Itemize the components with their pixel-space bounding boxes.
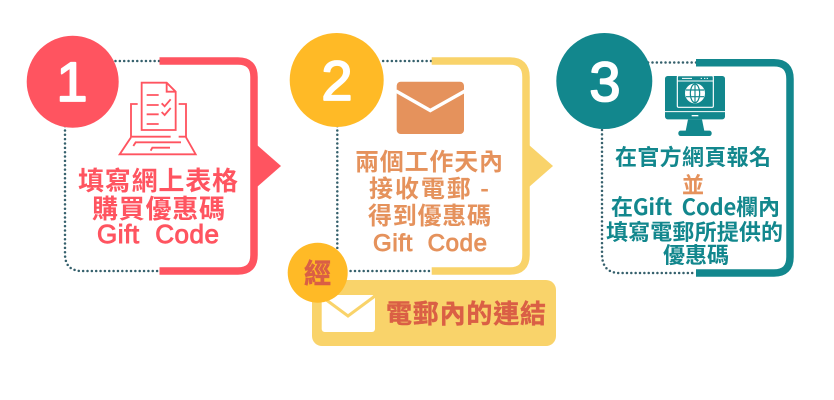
step 3 number badge: 3 (589, 50, 621, 113)
panel: step 2 (290, 33, 553, 271)
step 3 number badge (556, 33, 652, 129)
badge: via: 經 (304, 252, 331, 291)
step 3 text (606, 140, 783, 270)
step 1 number badge (27, 36, 119, 128)
step 3 text: 優惠碼 (663, 238, 729, 270)
step 2 number badge (290, 33, 384, 127)
step 3 text: 在Gift Code欄內 (611, 190, 780, 222)
step 1 number badge: 1 (56, 50, 88, 113)
step 3 frame (696, 63, 790, 273)
callout: via email link (288, 243, 556, 346)
callout text: 電郵內的連結 (386, 294, 546, 331)
panel: step 3 (556, 33, 790, 273)
step 3 text: 並 (682, 168, 704, 200)
step 2 text: Gift Code (373, 230, 487, 257)
step 1 text: 購買優惠碼 (92, 189, 225, 226)
icon: laptop with checklist (120, 83, 196, 154)
step 2 text (355, 142, 503, 257)
icon: envelope (396, 82, 465, 134)
badge: via (288, 243, 348, 303)
panel: step 1 (27, 36, 281, 271)
icon: monitor with globe (665, 76, 725, 136)
step 1 text: Gift Code (97, 219, 219, 249)
icon: white envelope (321, 295, 375, 332)
step 2 number badge: 2 (321, 49, 353, 112)
step 3 text: 在官方網頁報名 (615, 140, 771, 172)
step 1 text: 填寫網上表格 (78, 161, 238, 198)
step 3 text: 填寫電郵所提供的 (606, 215, 783, 247)
step 2 frame and arrow (432, 61, 553, 271)
step 1 text (78, 161, 238, 249)
step 2 text: 接收電郵 - (369, 169, 489, 204)
step 1 frame and arrow (160, 61, 281, 271)
step 2 text: 兩個工作天內 (355, 142, 503, 177)
step 2 text: 得到優惠碼 (368, 196, 491, 231)
